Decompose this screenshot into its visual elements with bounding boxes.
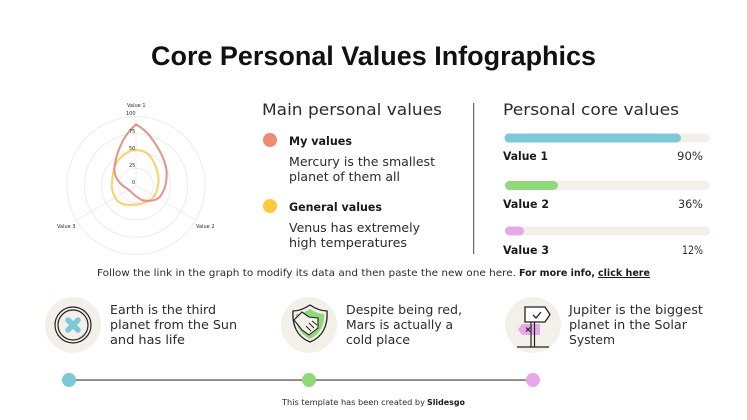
text: jupiter: Jupiter is the biggest — [568, 303, 703, 317]
bar: value 1: 90% — [677, 149, 703, 163]
text: venus — [289, 221, 420, 250]
axis labels — [57, 103, 215, 230]
bar: value 1: Value 1 — [503, 149, 548, 163]
text: earth — [110, 303, 237, 347]
radar chart — [57, 103, 215, 254]
axis labels: Value 1 — [127, 103, 146, 109]
timeline — [62, 373, 540, 387]
text: earth: and has life — [110, 333, 185, 347]
axis labels: Value 3 — [57, 224, 76, 230]
bar: value 3: 12% — [682, 243, 703, 257]
radar series: general values — [112, 150, 159, 205]
text: jupiter: planet in the Solar — [569, 318, 688, 332]
legend label: my values: My values — [289, 134, 352, 148]
legend dot: general values — [263, 199, 277, 213]
panel: main personal values — [262, 100, 442, 250]
text: jupiter: System — [569, 333, 615, 347]
bar: value 3: Value 3 — [503, 243, 549, 257]
note text: Follow the link in the graph to modify its data and then paste the new one here. — [97, 268, 516, 279]
note text: click here — [598, 268, 650, 279]
bar: value 2: 36% — [678, 197, 703, 211]
text: mars: Mars is actually a — [346, 318, 453, 332]
text: mercury — [289, 155, 435, 184]
heading: personal core values: Personal core values — [503, 100, 679, 119]
axis labels: 50 — [129, 146, 135, 152]
bar: value 2 — [503, 181, 710, 211]
text: venus: high temperatures — [289, 236, 407, 250]
text: mercury: Mercury is the smallest — [289, 155, 435, 169]
footer credit: Slidesgo — [427, 398, 466, 407]
text: jupiter — [568, 303, 703, 347]
bar: value 2: Value 2 — [503, 197, 549, 211]
note text: For more info, — [519, 268, 595, 279]
axis labels: 25 — [129, 163, 135, 169]
axis labels: 100 — [126, 111, 136, 117]
title: Core Personal Values Infographics — [151, 41, 596, 71]
icon: cross in rings — [45, 297, 101, 353]
icon: shield with handshake — [281, 297, 337, 353]
legend dot: my values — [263, 133, 277, 147]
footer credit: This template has been created by — [281, 398, 425, 407]
text: mars: Despite being red, — [346, 303, 462, 317]
text: venus: Venus has extremely — [289, 221, 420, 235]
radar series: my values — [114, 124, 167, 201]
text: mercury: planet of them all — [289, 170, 400, 184]
panel: personal core values — [503, 100, 710, 257]
bar: value 1 — [503, 134, 710, 163]
axis labels: Value 2 — [196, 224, 215, 230]
text: mars — [346, 303, 462, 347]
icon: signpost — [505, 297, 561, 353]
text: mars: cold place — [346, 333, 410, 347]
axis labels: 75 — [129, 129, 135, 135]
text: earth: planet from the Sun — [110, 318, 237, 332]
bar: value 3 — [503, 226, 710, 257]
legend label: general values: General values — [289, 200, 382, 214]
heading: main personal values: Main personal values — [262, 100, 442, 119]
text: earth: Earth is the third — [110, 303, 216, 317]
axis labels: 0 — [132, 180, 135, 186]
